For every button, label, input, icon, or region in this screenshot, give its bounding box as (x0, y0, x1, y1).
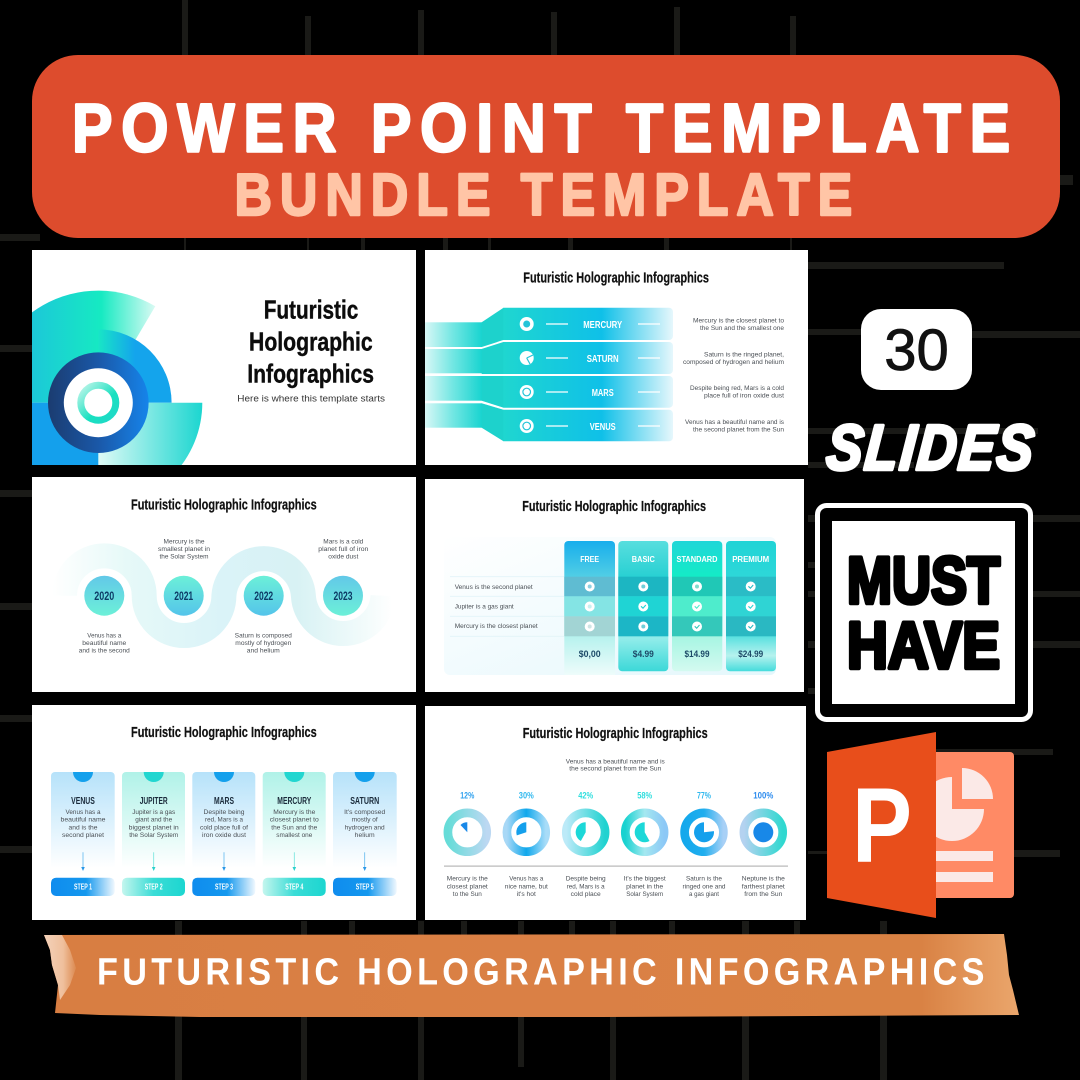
card: mars step 3: STEP 3 (215, 883, 233, 892)
column: basic: $4.99 (633, 649, 654, 659)
planet descriptions: Mercury is the closest planet to (693, 317, 784, 324)
column: premium: PREMIUM (732, 555, 770, 564)
card: jupiter step 2 (122, 772, 185, 896)
column: standard (672, 541, 722, 671)
planet descriptions: composed of hydrogen and helium (683, 359, 785, 366)
card: jupiter step 2: biggest planet in (129, 824, 179, 831)
have: HAVE (847, 608, 1000, 682)
row: venus: VENUS (590, 422, 616, 433)
gauge: 77% (685, 790, 723, 852)
node 2022: 2022 (254, 589, 273, 603)
node 2023 (323, 576, 363, 616)
footer text: FUTURISTIC HOLOGRAPHIC INFOGRAPHICS (97, 950, 984, 993)
planet descriptions: the Sun and the smallest one (700, 325, 784, 332)
caption: mercury: smallest planet in (158, 546, 210, 553)
caption: venus: beautiful name (82, 640, 127, 647)
panel: steps slide (32, 705, 416, 920)
gauge captions: closest planet (447, 883, 488, 890)
card: mercury step 4 (263, 772, 326, 896)
panel: planet rows slide (425, 250, 808, 465)
column: premium: $24.99 (738, 649, 763, 659)
node 2021 (164, 576, 204, 616)
icon: powerpoint logo: P (852, 765, 912, 885)
gauge captions: Venus has a (509, 876, 544, 883)
gauge: 42% (566, 790, 605, 852)
row labels (450, 577, 564, 636)
caption: mercury: the Solar System (160, 554, 209, 561)
card: jupiter step 2: the Solar System (129, 832, 179, 839)
white separators (425, 341, 504, 409)
caption: saturn: mostly of hydrogen (235, 640, 292, 647)
intro text (566, 758, 665, 773)
gauge captions (447, 876, 785, 898)
concentric circle graphic (32, 290, 202, 465)
caption: venus: Venus has a (87, 632, 122, 639)
card: jupiter step 2: giant and the (135, 817, 173, 824)
node 2020: 2020 (94, 589, 115, 603)
caption: mars: Mars is a cold (323, 538, 364, 545)
gauge captions: Saturn is the (686, 876, 722, 883)
panel: timeline slide (32, 477, 416, 692)
planet descriptions: Despite being red, Mars is a cold (690, 385, 784, 392)
gauge captions: nice name, but (505, 883, 548, 890)
node 2020 (84, 576, 124, 616)
caption: mars (318, 538, 369, 561)
row: mars: MARS (592, 388, 614, 399)
slide title: Futuristic Holographic Infographics (522, 498, 706, 515)
gauge: 100%: 100% (753, 790, 773, 800)
card: mercury step 4: STEP 4 (285, 883, 304, 892)
gauge captions: planet in the (626, 883, 664, 890)
left ribbon strips (425, 322, 482, 428)
separator line (444, 866, 788, 867)
planet descriptions: the second planet from the Sun (693, 427, 784, 434)
card: venus step 1: beautiful name (60, 817, 106, 824)
row: mercury: MERCURY (583, 320, 622, 331)
panel: cover slide (32, 250, 416, 465)
card: venus step 1: STEP 1 (74, 883, 92, 892)
card: venus step 1 (51, 772, 115, 896)
gauge captions: cold place (571, 891, 601, 898)
panel: percentages slide (425, 706, 806, 920)
footer torn tape banner (44, 934, 1019, 1017)
title banner (32, 55, 1060, 238)
wave ribbon (64, 556, 383, 636)
gauge captions: Neptune is the (742, 876, 785, 883)
column: basic (618, 541, 668, 671)
card: saturn step 5: It's composed (344, 809, 386, 816)
column: basic: BASIC (632, 555, 655, 564)
card: venus step 1: and is the (68, 824, 98, 831)
gauge captions: from the Sun (744, 891, 783, 898)
caption: mars: planet full of iron (318, 546, 369, 553)
badge: must have (818, 506, 1030, 720)
caption: mercury (158, 538, 210, 561)
gauge: 30% (507, 790, 546, 852)
column: free: FREE (580, 555, 600, 564)
column: free (564, 541, 615, 675)
intro text: Venus has a beautiful name and is (566, 758, 665, 765)
slide title: Futuristic Holographic Infographics (131, 496, 317, 513)
card: mars step 3: Despite being (204, 809, 245, 816)
gauge: 58% (625, 790, 664, 852)
card: saturn step 5: helium (355, 832, 375, 839)
caption: venus (79, 632, 130, 655)
gauge: 12%: 12% (460, 790, 474, 800)
card: mercury step 4: smallest one (276, 832, 313, 839)
card: saturn step 5: hydrogen and (345, 824, 385, 831)
badge: 30: 30 (884, 318, 949, 383)
planet descriptions: place full of iron oxide dust (704, 393, 784, 400)
must: MUST (847, 543, 1000, 617)
caption: saturn: Saturn is composed (235, 632, 292, 639)
table backdrop (444, 537, 776, 675)
gauge captions: farthest planet (742, 883, 785, 890)
gauge captions: It's the biggest (624, 876, 666, 883)
gauge: 77%: 77% (697, 790, 711, 800)
row: mercury (503, 308, 673, 340)
card: saturn step 5: STEP 5 (356, 883, 374, 892)
cover title: Holographic (249, 326, 373, 356)
gauge captions: Mercury is the (447, 876, 488, 883)
node 2023: 2023 (334, 589, 353, 603)
label: slides: SLIDES (824, 411, 1037, 483)
gauge captions: it's hot (517, 891, 536, 898)
column: premium (726, 541, 776, 671)
card: jupiter step 2: STEP 2 (145, 883, 163, 892)
card: mars step 3: red, Mars is a (205, 817, 243, 824)
card: mercury step 4: the Sun and the (271, 824, 318, 831)
planet descriptions (683, 317, 785, 434)
badge: 30 (861, 309, 972, 390)
gauge captions: red, Mars is a (567, 883, 605, 890)
row labels: Mercury is the closest planet (455, 623, 538, 630)
gauge: 30%: 30% (519, 790, 534, 800)
column: free: $0,00 (579, 649, 601, 659)
icon: powerpoint logo (827, 732, 1014, 918)
slide title: Futuristic Holographic Infographics (523, 270, 709, 286)
caption: venus: and is the second (79, 648, 130, 655)
row labels: Jupiter is a gas giant (455, 604, 514, 611)
node 2021: 2021 (174, 589, 193, 603)
card: saturn step 5: SATURN (350, 795, 379, 807)
node 2022 (244, 576, 284, 616)
cover subtitle: Here is where this template starts (237, 394, 385, 404)
row: mars (503, 376, 673, 408)
cover title: Futuristic (264, 294, 358, 324)
card: mars step 3: cold place full of (200, 824, 248, 831)
cover title: Infographics (247, 358, 374, 388)
row labels: Venus is the second planet (455, 584, 533, 591)
card: mars step 3 (192, 772, 255, 896)
planet descriptions: Saturn is the ringed planet, (704, 351, 784, 358)
card: mercury step 4: closest planet to (270, 817, 319, 824)
card: mercury step 4: Mercury is the (273, 809, 316, 816)
row: saturn: SATURN (587, 354, 619, 365)
card: mars step 3: iron oxide dust (202, 832, 246, 839)
card: mars step 3: MARS (214, 795, 234, 807)
card: mercury step 4: MERCURY (277, 795, 311, 807)
gauge captions: Solar System (626, 891, 664, 898)
caption: mercury: Mercury is the (164, 538, 205, 545)
heading: power point template: POWER POINT TEMPLATE (72, 89, 1010, 167)
card: jupiter step 2: JUPITER (140, 795, 168, 807)
caption: saturn (235, 632, 292, 655)
column: standard: STANDARD (676, 555, 718, 564)
card: saturn step 5 (333, 772, 397, 896)
gauge captions: Despite being (566, 876, 606, 883)
gauge captions: to the Sun (453, 891, 482, 898)
card: venus step 1: second planet (62, 832, 104, 839)
subheading: bundle template: BUNDLE TEMPLATE (234, 162, 852, 228)
panel: pricing table slide (425, 479, 804, 692)
cover title (247, 294, 374, 388)
gauge captions: a gas giant (689, 891, 719, 898)
row: saturn (503, 342, 673, 374)
caption: mars: oxide dust (328, 554, 358, 561)
gauge: 58%: 58% (637, 790, 652, 800)
intro text: the second planet from the Sun (569, 766, 662, 773)
gauge captions: ringed one and (682, 883, 726, 890)
caption: saturn: and helium (247, 648, 280, 655)
slide title: Futuristic Holographic Infographics (131, 724, 317, 741)
gauge: 12% (448, 790, 487, 852)
slide title: Futuristic Holographic Infographics (523, 725, 708, 742)
card: saturn step 5: mostly of (352, 817, 378, 824)
gauge: 42%: 42% (578, 790, 593, 800)
card: jupiter step 2: Jupiter is a gas (132, 809, 176, 816)
column: standard: $14.99 (684, 649, 710, 659)
row: venus (503, 410, 673, 441)
planet descriptions: Venus has a beautiful name and is (685, 419, 785, 426)
ribbon connectors (482, 308, 504, 441)
card: venus step 1: Venus has a (66, 809, 101, 816)
gauge: 100% (744, 790, 783, 852)
card: venus step 1: VENUS (71, 795, 95, 807)
